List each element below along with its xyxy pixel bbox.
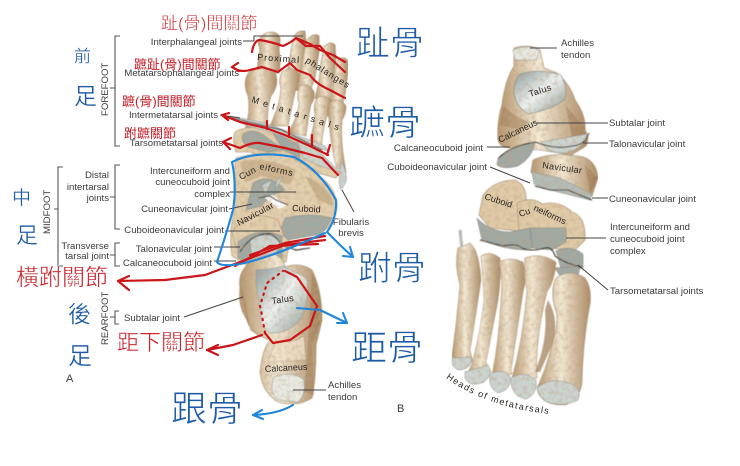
- label: phalanges continued: phalanges: [304, 55, 352, 90]
- labels foot A: Intermetatarsal joints: [129, 110, 218, 121]
- labels foot B: Cuneonavicular joint: [609, 194, 696, 205]
- red handwritten joint names: 趾(骨)間關節: [161, 14, 257, 33]
- labels foot A: A: [66, 373, 74, 385]
- labels foot A: Tarsometatarsal joints: [130, 138, 223, 149]
- label: Calcaneus B: Calcaneus: [496, 117, 540, 145]
- label: Cuboid: Cuboid: [292, 203, 321, 214]
- labels foot B: cuneocuboid joint: [610, 234, 685, 245]
- labels foot A: tendon: [328, 392, 357, 403]
- labels foot A: Cuboideonavicular joint: [124, 225, 224, 236]
- labels foot A: MIDFOOT: [42, 190, 53, 234]
- illustration: foot B plantar bones: [452, 46, 598, 405]
- blue handwritten region and bone names: 後: [68, 301, 91, 327]
- labels foot A: Achilles: [328, 380, 361, 391]
- labels foot B: Achilles: [561, 38, 594, 49]
- labels foot A: Intercuneiform and: [150, 166, 230, 177]
- labels foot A: complex: [194, 189, 230, 200]
- leader lines: [184, 36, 608, 390]
- blue handwritten region and bone names: 跗骨: [358, 250, 426, 288]
- blue handwritten region and bone names: 趾骨: [356, 25, 424, 63]
- navicular: [531, 155, 598, 200]
- metatarsals: [452, 243, 590, 405]
- labels foot A: Metatarsophalangeal joints: [124, 68, 239, 79]
- tarsometatarsal base wedges: [230, 116, 340, 178]
- labels foot B: complex: [610, 246, 646, 257]
- labels foot A: [42, 37, 369, 403]
- blue handwritten region and bone names: [12, 25, 426, 429]
- metatarsals: [245, 68, 346, 190]
- labels foot A: Distal: [85, 170, 109, 181]
- label: Talus: Talus: [271, 293, 295, 306]
- label: Cuneiforms end: eiforms: [259, 161, 294, 178]
- label: Navicular B: Navicular: [542, 160, 583, 176]
- labels foot B: Calcaneocuboid joint: [394, 143, 483, 154]
- blue handwritten region and bone names: 前: [74, 47, 91, 66]
- red handwritten joint names: 距下關節: [117, 330, 205, 355]
- label: Cuneiforms: Cun: [237, 164, 258, 182]
- labels foot A: Interphalangeal joints: [151, 37, 242, 48]
- label: Heads of metatarsals: Heads of metatarsals: [446, 373, 548, 414]
- blue handwritten region and bone names: 蹠骨: [349, 102, 421, 143]
- label: Navicular: Navicular: [235, 200, 275, 228]
- label: Cuboid B: Cuboid: [483, 191, 514, 210]
- red handwritten joint names: [16, 14, 257, 355]
- labels foot A: tarsal joint: [65, 251, 109, 262]
- labels foot A: REARFOOT: [100, 292, 111, 345]
- labels foot A: Transverse: [61, 241, 109, 252]
- calcaneus and talus: [240, 254, 322, 404]
- label: Talus B: Talus: [528, 82, 553, 99]
- red handwritten joint names: 蹠趾(骨)間關節: [134, 57, 221, 72]
- brackets foot A: [54, 36, 120, 324]
- toes and phalanges: [257, 31, 348, 106]
- red handwritten joint names: 蹠(骨)間關節: [122, 94, 196, 109]
- labels foot A: cuneocuboid joint: [155, 177, 230, 188]
- red handwritten joint names: 橫跗關節: [16, 264, 108, 290]
- labels foot B: tendon: [561, 50, 590, 61]
- labels foot A: brevis: [338, 228, 364, 239]
- labels foot B: B: [397, 403, 404, 415]
- labels foot A: Subtalar joint: [124, 313, 180, 324]
- red handwritten joint names: 跗蹠關節: [124, 126, 176, 141]
- labels foot A: Talonavicular joint: [136, 244, 212, 255]
- labels foot B: Subtalar joint: [609, 118, 665, 129]
- labels foot A: Fibularis: [333, 217, 369, 228]
- label: Cuneiforms B end: neiforms: [532, 203, 568, 227]
- blue tracings and arrows: [217, 154, 353, 419]
- blue handwritten region and bone names: 距骨: [351, 327, 423, 368]
- blue handwritten region and bone names: 足: [68, 343, 92, 370]
- illustration: foot A dorsal skeleton: [230, 31, 348, 404]
- labels foot B: Cuboideonavicular joint: [387, 162, 487, 173]
- labels foot A: Cuneonavicular joint: [141, 204, 228, 215]
- red joint tracings: [118, 38, 345, 355]
- labels foot A: intertarsal: [67, 182, 109, 193]
- bone labels foot A: [235, 52, 352, 374]
- blue handwritten region and bone names: 足: [74, 83, 97, 109]
- labels foot B: Tarsometatarsal joints: [610, 286, 704, 297]
- cuboid and cuneiforms: [460, 180, 585, 276]
- blue handwritten region and bone names: 跟骨: [171, 388, 243, 429]
- label: Calcaneus: Calcaneus: [265, 362, 308, 374]
- label: Cuneiforms B: Cu: [518, 206, 532, 219]
- labels foot A: FOREFOOT: [100, 63, 111, 116]
- labels foot A: joints: [86, 193, 109, 204]
- blue handwritten region and bone names: 中: [12, 187, 31, 209]
- labels foot A: Calcaneocuboid joint: [123, 258, 212, 269]
- blue handwritten region and bone names: 足: [16, 223, 38, 248]
- label: Metatarsals: Metatarsals: [250, 94, 345, 134]
- labels foot B: [387, 38, 704, 415]
- label: Proximal phalanges: Proximal: [257, 52, 300, 65]
- calcaneus: [497, 46, 589, 168]
- labels foot B: Talonavicular joint: [609, 139, 686, 150]
- bone labels foot B: [446, 82, 583, 414]
- cuneiforms, cuboid, navicular: [231, 153, 337, 266]
- labels foot B: Intercuneiform and: [610, 222, 690, 233]
